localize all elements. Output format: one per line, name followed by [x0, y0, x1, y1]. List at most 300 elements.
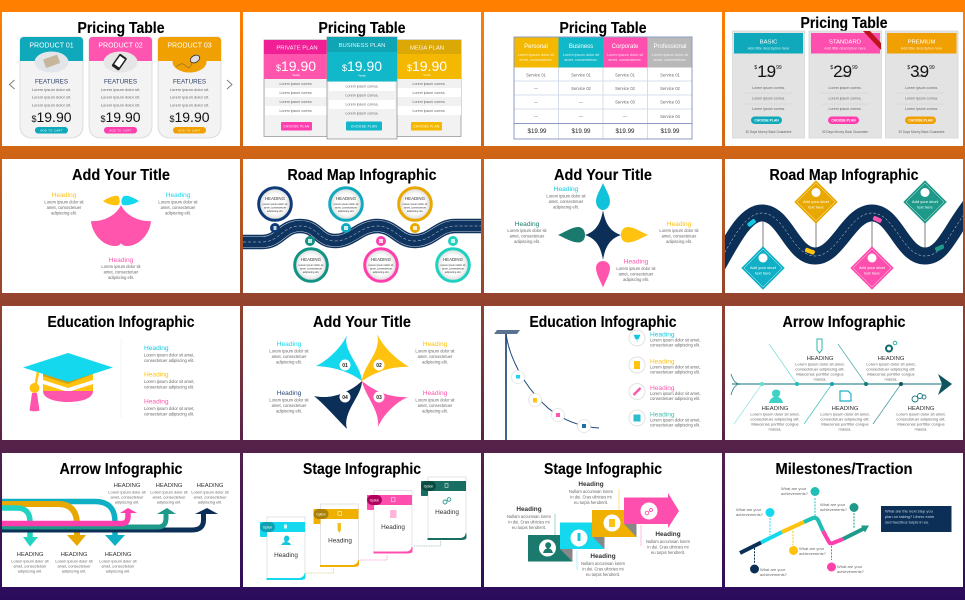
text blocks: bottom headings: HEADING	[105, 552, 132, 558]
road stop: pink: HEADING	[371, 257, 392, 262]
comparison table: $19.99	[528, 128, 547, 135]
text block: green heading: Lorem ipsum dolor sit	[507, 228, 547, 233]
pricing card: basic: Monthly	[765, 75, 774, 78]
petal: cyan 01: 01	[342, 363, 348, 369]
comparison table: amet, consectetuer.	[519, 58, 553, 62]
text block: yellow heading: consectetuer adipiscing elit.	[144, 384, 194, 390]
milestone pin: turquoise: What are your	[781, 486, 807, 491]
text block: pink heading	[415, 390, 455, 414]
plan column: business: CHOOSE PLAN	[351, 124, 378, 128]
plan column: mega: Yearly	[423, 73, 431, 77]
plan column: business	[327, 37, 397, 139]
text block: yellow heading: Lorem ipsum dolor sit amet,	[144, 379, 195, 384]
panel: education cap	[2, 306, 240, 440]
text block: cyan heading: Lorem ipsum dolor sit	[546, 194, 586, 198]
road stop: teal: adipiscing elit.	[338, 209, 354, 213]
milestone pin: navy: What are your	[760, 567, 786, 572]
pricing card: product 03: $19.90	[169, 109, 210, 125]
pricing card: product 01	[20, 37, 83, 138]
text block: pink heading: Heading	[624, 258, 649, 266]
plan column: private: Yearly	[292, 73, 300, 77]
text block: heading top 1: consectetuer adipiscing elit.	[795, 366, 845, 372]
plan column: mega: CHOOSE PLAN	[413, 124, 440, 128]
drop: cyan	[596, 183, 610, 210]
text blocks: top headings: HEADING	[114, 483, 141, 489]
panel: arrow fishbone	[725, 306, 963, 440]
arrow band: yellow down	[2, 504, 86, 546]
text block: heading right: Nullam accumsan lorem	[646, 539, 691, 544]
pricing card: premium: Lorem ipsum correa.	[905, 107, 938, 111]
title: Education Infographic	[48, 314, 195, 331]
milestone line	[740, 518, 869, 553]
panel: road map signs	[716, 159, 965, 293]
text block: pink heading: Lorem ipsum dolor sit	[415, 398, 455, 402]
road stop: pink: Lorem ipsum dolor sit	[369, 263, 394, 267]
comparison table: —	[579, 100, 584, 104]
text block: heading bottom 2: HEADING	[832, 406, 859, 412]
text blocks: top headings: adipiscing elit.	[157, 500, 181, 504]
road stop: yellow: adipiscing elit.	[407, 209, 423, 213]
callout box	[881, 506, 952, 532]
road stop: green: HEADING	[301, 257, 322, 262]
text block: heading top 2: HEADING	[878, 356, 905, 362]
panel: road map circles	[243, 159, 481, 293]
comparison table: $19.99	[616, 128, 635, 135]
text block: cyan heading: Heading	[144, 345, 169, 352]
milestone pin: yellow	[789, 531, 827, 556]
text block: heading left: eu turpis hendrerit.	[512, 525, 546, 530]
plan column: business: $19.90	[342, 58, 382, 74]
pricing card: premium: Monthly	[918, 75, 927, 78]
plan column: mega: Lorem ipsum correa.	[413, 109, 445, 113]
text blocks: bottom headings: adipiscing elit.	[18, 568, 42, 574]
item: cyan	[629, 330, 701, 348]
road stop: green	[295, 236, 327, 281]
pricing card: product 01: FEATURES	[35, 78, 68, 86]
sign: yellow	[795, 181, 837, 223]
road stop: pink: amet, consectetuer	[370, 266, 392, 270]
fishbone arrow	[731, 344, 952, 424]
text blocks: top headings: adipiscing elit.	[115, 500, 139, 504]
comparison table: —	[534, 114, 539, 119]
pricing card: product 01: Lorem ipsum dolor sit.	[32, 102, 71, 108]
road stop: navy: amet, consectetuer	[264, 206, 286, 210]
text block: cyan heading: Lorem ipsum dolor sit amet,	[144, 352, 195, 358]
pricing card: standard: STANDARD	[829, 40, 861, 46]
text block: heading top 2: Lorem ipsum dolor sit amet,	[866, 362, 916, 366]
comparison table: Service 03	[615, 100, 636, 104]
text block: pink heading: amet, consectetuer	[418, 403, 453, 408]
plan column: mega: Lorem ipsum correa.	[413, 82, 445, 86]
milestone pin: pink	[827, 546, 865, 574]
text block: cyan heading: consectetuer adipiscing elit.	[144, 358, 194, 363]
pricing card: basic: Lorem ipsum correa.	[752, 86, 785, 90]
sign: teal	[904, 181, 946, 223]
panel: stage arrows	[484, 453, 722, 587]
pricing card: premium: Lorem ipsum correa.	[905, 86, 938, 90]
pricing card: standard: Monthly	[842, 75, 851, 78]
pricing card: standard: Lorem ipsum correa.	[829, 107, 861, 111]
stage block: green	[528, 535, 572, 562]
text block: heading bottom 1: consectetuer adipiscing elit.	[750, 416, 800, 422]
text block: navy heading: Heading	[277, 390, 302, 397]
drop: pink	[596, 261, 610, 288]
sign: cyan	[742, 247, 784, 289]
text block: heading top: eu turpis hendrerit.	[574, 500, 608, 505]
text block: cyan heading: adipiscing elit.	[165, 210, 191, 216]
panel: add your title petals	[243, 306, 481, 440]
text blocks: bottom headings: HEADING	[61, 552, 88, 558]
text blocks: top headings: amet, consectetuer	[110, 494, 144, 500]
text block: yellow heading: adipiscing elit.	[666, 239, 692, 244]
ceiling bar and pole	[494, 330, 599, 440]
plan column: mega: Lorem ipsum correa.	[413, 100, 445, 104]
text block: heading top 2: consectetuer adipiscing elit.	[866, 366, 916, 372]
title: Stage Infographic	[544, 461, 662, 478]
cars	[747, 215, 945, 255]
comparison table: —	[534, 100, 539, 104]
milestone pin: turquoise	[781, 486, 820, 516]
text blocks: bottom headings	[11, 552, 138, 574]
pricing card: basic: $	[754, 65, 757, 71]
pricing card: basic: Add little description here	[748, 46, 789, 50]
pricing card: product 02: Lorem ipsum dolor sit.	[101, 87, 140, 92]
text block: cyan heading: Lorem ipsum dolor sit	[269, 348, 309, 354]
text block: yellow heading: Heading	[144, 372, 169, 378]
pricing card: premium: 30 Days Money Back Guarantee	[898, 130, 945, 134]
milestone pin: green: What are your	[820, 502, 846, 507]
text block: pink heading: amet, consectetuer	[104, 270, 139, 274]
road	[243, 226, 481, 242]
petal: navy 04	[314, 381, 362, 429]
text block: heading bottom: Heading	[590, 553, 616, 560]
pricing card: product 01: Lorem ipsum dolor sit.	[32, 94, 71, 100]
callout box: plan on taking? Libero enim	[885, 514, 935, 519]
road stop: pink	[365, 236, 397, 281]
road stop: turquoise: amet, consectetuer	[442, 266, 464, 270]
text block: pink heading: Lorem ipsum dolor sit	[101, 264, 141, 269]
text block: heading bottom 2: Lorem ipsum dolor sit amet,	[820, 412, 870, 416]
milestone pin: cyan: What are your	[736, 507, 762, 512]
text blocks: top headings: amet, consectetuer	[193, 494, 227, 500]
petal: navy 04: 04	[342, 395, 348, 401]
item: pink: Heading	[650, 385, 675, 392]
text block: heading bottom 2: Maecenas porttitor congue	[821, 422, 869, 426]
road stop: navy	[259, 188, 291, 233]
text block: heading top	[569, 481, 614, 505]
road stop: teal: amet, consectetuer	[335, 206, 357, 210]
pricing card: standard	[809, 31, 882, 138]
item: cyan: Heading	[650, 332, 675, 338]
text block: heading bottom 1	[750, 406, 800, 432]
text block: heading bottom 1: HEADING	[762, 406, 789, 412]
petal: yellow 02: 02	[376, 363, 382, 369]
comparison table: Service 01	[526, 72, 547, 78]
item: green: Heading	[650, 412, 675, 418]
pricing card: product 02	[89, 37, 152, 138]
item: cyan: consectetuer adipiscing elit.	[650, 342, 700, 348]
plan column: private: CHOOSE PLAN	[283, 124, 310, 128]
text block: yellow heading: Heading	[52, 192, 77, 199]
text block: heading left: in dui. Cras ultricies mi	[508, 520, 550, 524]
pricing card: product 02: PRODUCT 02	[98, 42, 143, 50]
pricing card: standard: Add little description here	[824, 46, 866, 50]
text block: yellow heading	[659, 221, 699, 244]
item: pink: Lorem ipsum dolor sit amet,	[650, 391, 701, 396]
pricing card: basic: CHOOSE PLAN	[754, 118, 779, 122]
text blocks: bottom headings: adipiscing elit.	[62, 568, 86, 574]
poles	[763, 220, 925, 250]
comparison table: amet, consectetuer.	[564, 58, 598, 62]
timeline nodes	[512, 370, 590, 432]
text blocks: top headings: Lorem ipsum dolor sit	[191, 490, 230, 494]
text block: yellow heading	[44, 192, 84, 216]
stage card: pink	[367, 490, 412, 553]
text block: heading left: Heading	[516, 506, 542, 513]
plan column: mega	[397, 40, 461, 136]
title: Add Your Title	[313, 314, 411, 331]
title: Pricing Table	[78, 20, 165, 37]
milestone pin: green: achievements?	[820, 507, 848, 512]
petal: cyan 01	[316, 335, 362, 381]
milestone pin: yellow: What are your	[799, 546, 825, 551]
stage card: green	[421, 477, 466, 540]
text block: heading top 2: massa.	[885, 376, 897, 382]
title: Arrow Infographic	[60, 461, 183, 478]
connector 1	[306, 568, 334, 573]
title: Stage Infographic	[303, 461, 421, 478]
text block: cyan heading	[546, 186, 586, 210]
text block: heading bottom 3: massa.	[915, 426, 927, 432]
panel: pricing table product cards	[2, 12, 240, 146]
comparison table	[514, 37, 692, 139]
text block: pink heading: adipiscing elit.	[422, 408, 448, 414]
text blocks: top headings: amet, consectetuer	[152, 494, 186, 500]
text block: yellow heading: Lorem ipsum dolor sit	[44, 200, 84, 204]
petal: pink 03: 03	[376, 395, 382, 401]
leaf: cyan	[121, 196, 139, 205]
road stop: teal: HEADING	[336, 196, 357, 201]
comparison table: Personal	[524, 44, 548, 50]
text blocks: bottom headings: amet, consectetuer	[57, 564, 91, 568]
road stop: yellow	[399, 188, 431, 233]
text blocks: top headings: Lorem ipsum dolor sit	[108, 490, 147, 494]
plan column: private: PRIVATE PLAN	[276, 46, 318, 52]
stage card: cyan	[260, 517, 305, 580]
item: green	[629, 410, 701, 428]
comparison table: Business	[569, 44, 593, 50]
road stop: turquoise: HEADING	[443, 257, 464, 262]
pricing card: standard: 99	[852, 65, 858, 71]
text blocks: top headings: HEADING	[156, 483, 183, 489]
road stop: navy: HEADING	[265, 196, 286, 201]
milestone pin: green	[820, 502, 858, 529]
pricing card: premium: PREMIUM	[908, 40, 935, 46]
text block: cyan heading	[269, 341, 309, 364]
text block: heading bottom	[581, 553, 626, 577]
panel: pricing comparison table	[484, 12, 722, 146]
text blocks: bottom headings: HEADING	[17, 552, 44, 558]
title: Road Map Infographic	[770, 167, 919, 184]
petal: pink 03	[362, 381, 408, 427]
stage card: yellow	[314, 504, 358, 566]
text block: heading bottom: Nullam accumsan lorem	[581, 561, 626, 566]
text block: heading bottom 3	[896, 406, 946, 432]
pricing card: product 02: Lorem ipsum dolor sit.	[101, 94, 140, 100]
drop: yellow	[621, 227, 648, 242]
pricing card: standard: CHOOSE PLAN	[831, 118, 856, 122]
milestone pin: cyan	[736, 507, 774, 535]
title: Pricing Table	[560, 20, 647, 37]
pricing card: basic: BASIC	[760, 40, 778, 46]
sign: teal: text here	[917, 204, 934, 210]
milestone pin: turquoise: achievements?	[781, 491, 809, 496]
text block: heading bottom: in dui. Cras ultricies mi	[582, 566, 624, 572]
leaf: yellow	[103, 196, 120, 205]
text block: heading bottom: eu turpis hendrerit.	[586, 572, 620, 577]
text block: heading right	[646, 531, 691, 555]
arrow band: green up	[2, 508, 176, 527]
moustache: pink	[91, 205, 151, 246]
text block: pink heading: adipiscing elit.	[623, 277, 649, 282]
panel: add your title drops	[484, 159, 722, 293]
pricing card: basic: Lorem ipsum correa.	[752, 96, 785, 100]
star: navy	[585, 210, 621, 260]
title: Education Infographic	[530, 314, 677, 331]
text block: yellow heading: adipiscing elit.	[422, 360, 448, 364]
milestone pin: pink: What are your	[837, 564, 863, 569]
text block: cyan heading	[158, 192, 198, 216]
item: yellow: Lorem ipsum dolor sit amet,	[650, 364, 701, 370]
item: green: consectetuer adipiscing elit.	[650, 422, 700, 428]
text block: cyan heading: Heading	[554, 186, 579, 193]
text block: pink heading: amet, consectetuer	[619, 272, 654, 276]
pricing card: standard: Lorem ipsum correa.	[829, 96, 861, 100]
plan column: private: Lorem ipsum correa.	[280, 82, 312, 86]
text block: heading top 1	[795, 356, 845, 382]
plan column: private	[264, 40, 327, 136]
stage card: green: Heading	[435, 509, 459, 516]
sign: pink	[851, 247, 893, 289]
comparison table: $19.99	[661, 128, 680, 135]
road stop: pink: adipiscing elit.	[373, 270, 389, 274]
text block: navy heading: adipiscing elit.	[276, 408, 302, 414]
text block: heading bottom 1: Lorem ipsum dolor sit amet,	[750, 412, 800, 416]
panel: pricing basic standard premium	[725, 12, 963, 146]
text blocks: bottom headings: amet, consectetuer	[101, 564, 135, 568]
title: Add Your Title	[72, 167, 170, 184]
stage card: pink: Option	[370, 498, 379, 502]
text block: heading top 1: Maecenas porttitor congue	[796, 372, 844, 376]
text block: cyan heading: adipiscing elit.	[553, 204, 579, 210]
text block: heading right: eu turpis hendrerit.	[651, 550, 685, 555]
comparison table: Corporate	[612, 44, 639, 50]
text block: pink heading	[101, 257, 141, 280]
pricing card: basic: Lorem ipsum correa.	[752, 107, 785, 111]
text block: cyan heading	[144, 345, 195, 363]
text blocks: top headings: HEADING	[197, 483, 224, 489]
milestone pin: navy	[750, 548, 788, 577]
stage card: yellow: Heading	[328, 538, 352, 544]
plan column: private: $19.90	[276, 58, 316, 74]
text block: heading bottom 2	[820, 406, 870, 432]
comparison table: —	[579, 114, 584, 119]
title: Add Your Title	[554, 167, 652, 184]
text block: navy heading: amet, consectetuer	[272, 403, 307, 408]
dotted leader lines	[555, 489, 641, 570]
pricing card: product 03: PRODUCT 03	[167, 42, 212, 50]
text blocks: bottom headings: Lorem ipsum dolor sit	[99, 558, 138, 564]
text block: pink heading	[144, 398, 195, 416]
text block: yellow heading: Heading	[667, 221, 692, 228]
text block: heading left	[507, 506, 552, 530]
panel: milestones traction	[725, 453, 963, 587]
title: Road Map Infographic	[288, 167, 437, 184]
pricing card: product 02: $19.90	[100, 109, 141, 125]
text block: yellow heading: Lorem ipsum dolor sit	[415, 348, 455, 354]
text block: cyan heading: amet, consectetuer	[161, 205, 196, 210]
text blocks: top headings: adipiscing elit.	[198, 500, 222, 504]
text block: pink heading: Lorem ipsum dolor sit amet,	[144, 406, 195, 411]
pricing card: standard: 29	[833, 62, 852, 81]
text block: heading top 1: HEADING	[807, 356, 834, 362]
text block: green heading	[507, 221, 547, 244]
text blocks: top headings	[108, 483, 230, 504]
pricing card: product 01: ADD TO CART	[40, 128, 63, 132]
icon: gears	[886, 341, 897, 352]
text block: pink heading: consectetuer adipiscing elit.	[144, 412, 194, 416]
callout box: What are the next step you	[885, 508, 933, 514]
text block: heading top: Heading	[578, 481, 604, 488]
pricing card: basic: 99	[776, 65, 782, 71]
callout box: sed faucibus turpis in eu.	[885, 520, 929, 524]
text block: green heading: Heading	[515, 221, 540, 228]
stage block: yellow	[592, 510, 636, 537]
item: pink: consectetuer adipiscing elit.	[650, 396, 700, 401]
text block: heading left: Nullam accumsan lorem	[507, 514, 552, 519]
pricing card: product 01: PRODUCT 01	[29, 42, 74, 50]
sign: teal: Add your short	[912, 199, 939, 204]
stage card: pink: Heading	[381, 524, 405, 531]
text block: heading top 2: Maecenas porttitor congue	[867, 372, 915, 376]
pricing card: product 02: Lorem ipsum dolor sit.	[101, 102, 140, 108]
arrow band: turquoise down	[2, 508, 38, 546]
item: pink	[629, 384, 701, 401]
text blocks: bottom headings: adipiscing elit.	[106, 568, 130, 574]
pricing card: product 02: ADD TO CART	[109, 128, 132, 132]
item: yellow: consectetuer adipiscing elit.	[650, 370, 700, 374]
panel: add your title moustache	[2, 159, 240, 293]
petal: yellow 02	[362, 334, 409, 381]
comparison table: Service 01	[571, 72, 592, 78]
text block: cyan heading: amet, consectetuer	[549, 199, 584, 204]
pricing card: premium: CHOOSE PLAN	[908, 118, 933, 122]
stage card: cyan: Option	[263, 526, 272, 530]
text block: heading bottom 1: Maecenas porttitor congue	[751, 422, 799, 426]
road stop: green: adipiscing elit.	[303, 270, 319, 274]
road stop: yellow: HEADING	[405, 196, 426, 201]
pricing card: product 03: ADD TO CART	[178, 128, 201, 132]
sign: pink: Add your short	[859, 265, 886, 270]
pricing card: product 01: $19.90	[31, 109, 72, 125]
comparison table: Service 04	[660, 114, 681, 119]
text block: cyan heading: Heading	[277, 341, 302, 348]
comparison table: Professional	[653, 44, 687, 50]
text block: heading top: Nullam accumsan lorem	[569, 489, 614, 494]
text block: pink heading: Heading	[144, 398, 169, 406]
comparison table: —	[534, 86, 539, 91]
stage card: green: Option	[424, 484, 433, 488]
